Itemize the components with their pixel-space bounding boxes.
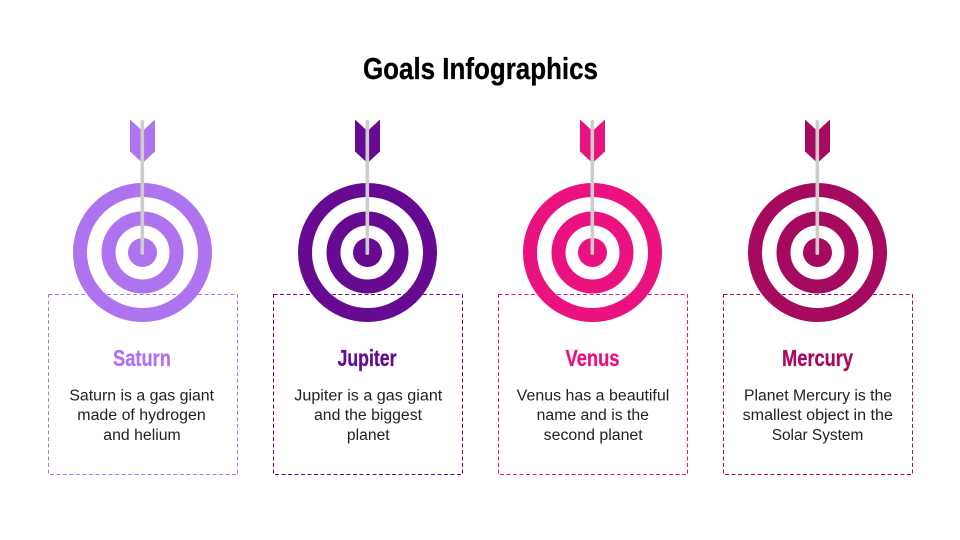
target: Venus [530, 190, 655, 315]
panel: Venus [498, 120, 688, 474]
arrow: Venus [580, 120, 605, 255]
target: Saturn [80, 190, 205, 315]
text box: Jupiter [274, 294, 462, 474]
arrow: Mercury [805, 120, 830, 255]
arrow: Saturn [130, 120, 155, 255]
description: Mercury: Planet Mercury is the [744, 388, 892, 405]
text box: Venus [498, 294, 688, 474]
heading: Jupiter: Jupiter [338, 345, 397, 371]
text box: Mercury [724, 294, 912, 474]
heading: Saturn: Saturn [113, 345, 171, 371]
description: Saturn: and helium [103, 427, 181, 444]
title: Goals Infographics [363, 51, 598, 86]
description: Venus [517, 388, 669, 444]
panel: Saturn [48, 120, 238, 474]
description: Jupiter: and the biggest [314, 407, 423, 424]
description: Venus: second planet [544, 427, 643, 444]
description: Jupiter: Jupiter is a gas giant [294, 388, 443, 405]
target: Jupiter [305, 190, 430, 315]
target: Mercury [755, 190, 880, 315]
panel: Mercury [724, 120, 912, 474]
description: Jupiter: planet [347, 427, 390, 444]
heading: Venus: Venus [566, 345, 620, 371]
description: Jupiter [294, 388, 443, 444]
text box: Saturn [48, 294, 238, 474]
description: Saturn: made of hydrogen [77, 407, 206, 424]
description: Saturn [69, 388, 215, 444]
description: Venus: Venus has a beautiful [517, 388, 669, 405]
description: Mercury: smallest object in the [743, 407, 893, 424]
description: Venus: name and is the [537, 407, 649, 424]
description: Mercury: Solar System [772, 427, 863, 444]
description: Saturn: Saturn is a gas giant [69, 388, 215, 405]
heading: Mercury: Mercury [782, 345, 853, 371]
description: Mercury [743, 388, 893, 444]
panel: Jupiter [274, 120, 462, 474]
arrow: Jupiter [355, 120, 380, 255]
